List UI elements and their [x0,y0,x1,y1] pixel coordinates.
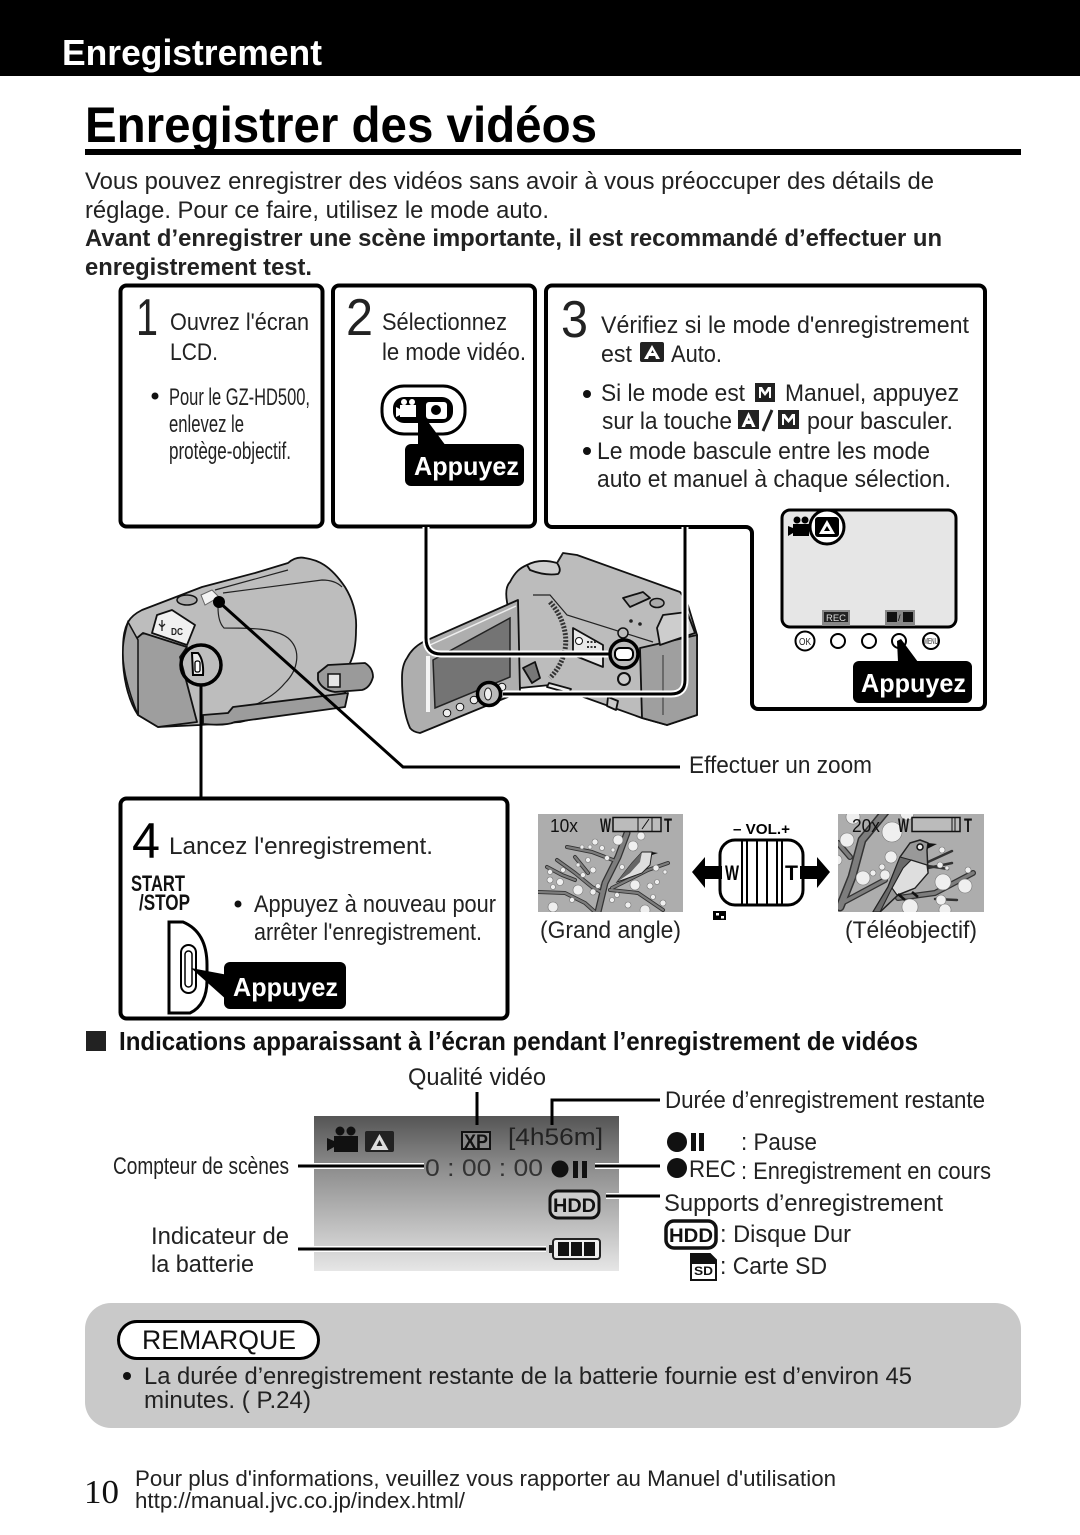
connector: step 3 to LCD button [478,527,685,706]
image: wide angle view: W [600,816,611,837]
title: Enregistrer des vidéos [85,97,597,153]
panel: step 4: Appuyez à nouveau pour [254,891,496,918]
panel: step 4: Lancez l'enregistrement. [169,833,433,860]
panel: step 3: sur la touche [602,408,732,435]
image: wide angle view [538,814,683,915]
icon: zoom lever: – VOL.+ [733,821,790,838]
callout: Appuyez: Appuyez [233,972,338,1002]
panel: remarque: REMARQUE [142,1325,296,1355]
connector: zoom lever [213,596,680,767]
image: wide angle view: 10x [550,816,578,836]
image: telephoto view [838,814,984,912]
icon: video/photo mode switch [382,386,465,446]
legend: recording status and media: : Pause [741,1129,817,1156]
panel: step 2: Sélectionnez [382,309,507,336]
panel: step 4: arrêter l'enregistrement. [254,919,482,946]
legend: recording status and media: HDD [669,1226,713,1247]
panel: step 2 [333,286,535,526]
footer: http://manual.jvc.co.jp/index.html/ [135,1488,466,1513]
labels and leaders: recording screen: Qualité vidéo [408,1064,546,1091]
panel: step 3: Si le mode est [601,380,745,407]
label: Grand angle: (Grand angle) [540,917,681,944]
icon: camera LCD screen: MENU [924,637,938,646]
image: telephoto view: W [898,816,909,837]
panel: step 3: Manuel, appuyez [785,380,959,407]
labels and leaders: recording screen: Durée d’enregistrement restante [665,1087,985,1114]
legend: recording status and media: REC [689,1156,736,1183]
intro text: Avant d’enregistrer une scène importante, il est recommandé d’effectuer un [85,225,942,252]
illustration: camcorder left view: DC [171,627,183,638]
panel: step 3: Auto. [671,341,722,368]
panel: step 4: 4 [132,813,160,869]
icon: zoom lever: T [785,862,798,885]
panel: step 1: protège-objectif. [169,438,291,465]
legend: recording status and media: : Disque Dur [720,1221,851,1248]
panel: step 1: Pour le GZ-HD500, [169,384,310,411]
footer [84,1466,836,1513]
illustration: camcorder with open LCD [402,553,697,733]
icon: start/stop button [169,922,228,1013]
panel: step 3: auto et manuel à chaque sélection. [597,466,951,493]
icon: battery [549,1239,600,1259]
icon: XP quality: XP [464,1132,488,1153]
callout: Appuyez [405,444,524,486]
diagram: recording screen: 0 : 00 : 00 [425,1155,543,1182]
panel: step 3: 3 [561,291,588,349]
panel: step 4: START [131,871,185,896]
intro text: Vous pouvez enregistrer des vidéos sans avoir à vous préoccuper des détails de [85,168,934,195]
panel: remarque [85,1303,1021,1428]
connector: step 2 to joystick [426,527,638,668]
title [85,97,1021,155]
panel: step 3: est [601,341,632,368]
panel: step 3: pour basculer. [807,408,953,435]
panel: step 3: Vérifiez si le mode d'enregistrement [601,312,969,339]
panel: step 1: enlevez le [169,411,244,438]
labels and leaders: recording screen: Compteur de scènes [113,1153,289,1180]
panel: step 2: le mode vidéo. [382,339,526,366]
intro text: réglage. Pour ce faire, utilisez le mode auto. [85,197,549,224]
label: Téléobjectif: (Téléobjectif) [845,917,977,944]
image: wide angle view: T [664,816,672,837]
icon: zoom lever [692,821,830,920]
icon: camera LCD screen: OK [799,637,811,648]
legend: recording status and media: : Carte SD [720,1253,827,1280]
icon: HDD: HDD [553,1196,596,1217]
panel: step 4 [120,798,508,1018]
header band [0,0,1080,76]
panel: step 3: Le mode bascule entre les mode [597,438,930,465]
footer: Pour plus d'informations, veuillez vous rapporter au Manuel d'utilisation [135,1466,836,1491]
legend: recording status and media: : Enregistrement en cours [741,1158,991,1185]
icon: pause status [552,1160,587,1178]
labels and leaders: recording screen: Indicateur de [151,1223,289,1250]
icon: HDD [550,1191,599,1218]
labels and leaders: recording screen [113,1064,985,1278]
panel: step 4: /STOP [139,890,190,915]
icon: camera LCD screen: / [898,613,901,623]
diagram: recording screen: [4h56m] [508,1124,603,1151]
diagram: recording screen [314,1116,619,1271]
labels and leaders: recording screen: la batterie [151,1251,254,1278]
header band: Enregistrement [62,32,322,73]
intro text [85,168,942,281]
panel: step 1: LCD. [170,339,218,366]
panel: step 1 [120,286,322,526]
panel: remarque: La durée d’enregistrement restante de la batterie fournie est d’environ 45 [144,1363,912,1390]
image: telephoto view: T [964,816,972,837]
panel: remarque: minutes. ( P.24) [144,1387,311,1414]
footer: 10 [84,1474,119,1511]
legend: recording status and media: Supports d’enregistrement [664,1190,943,1217]
callout: Appuyez: Appuyez [414,451,519,481]
section heading: on-screen indications: Indications apparaissant à l’écran pendant l’enregistrement de vidéos [119,1026,918,1056]
panel: step 2: 2 [346,289,373,347]
icon: zoom lever: W [725,862,739,885]
panel: step 3 [546,286,985,709]
connector: start/stop button to step 4 [181,645,221,798]
icon: camera LCD screen [782,510,956,662]
intro text: enregistrement test. [85,254,312,281]
panel: step 1: Ouvrez l'écran [170,309,309,336]
label: Effectuer un zoom: Effectuer un zoom [689,752,872,779]
callout: Appuyez [224,962,346,1009]
callout: Appuyez: Appuyez [861,668,966,698]
legend: recording status and media [664,1129,991,1280]
image: telephoto view: 20x [852,816,880,836]
illustration: camcorder left view [123,558,373,727]
icon: camera LCD screen: REC [826,613,847,623]
callout: Appuyez [853,661,972,703]
legend: recording status and media: SD [694,1264,713,1278]
panel: step 1: 1 [136,289,158,347]
icon: camera mode [327,1126,394,1152]
